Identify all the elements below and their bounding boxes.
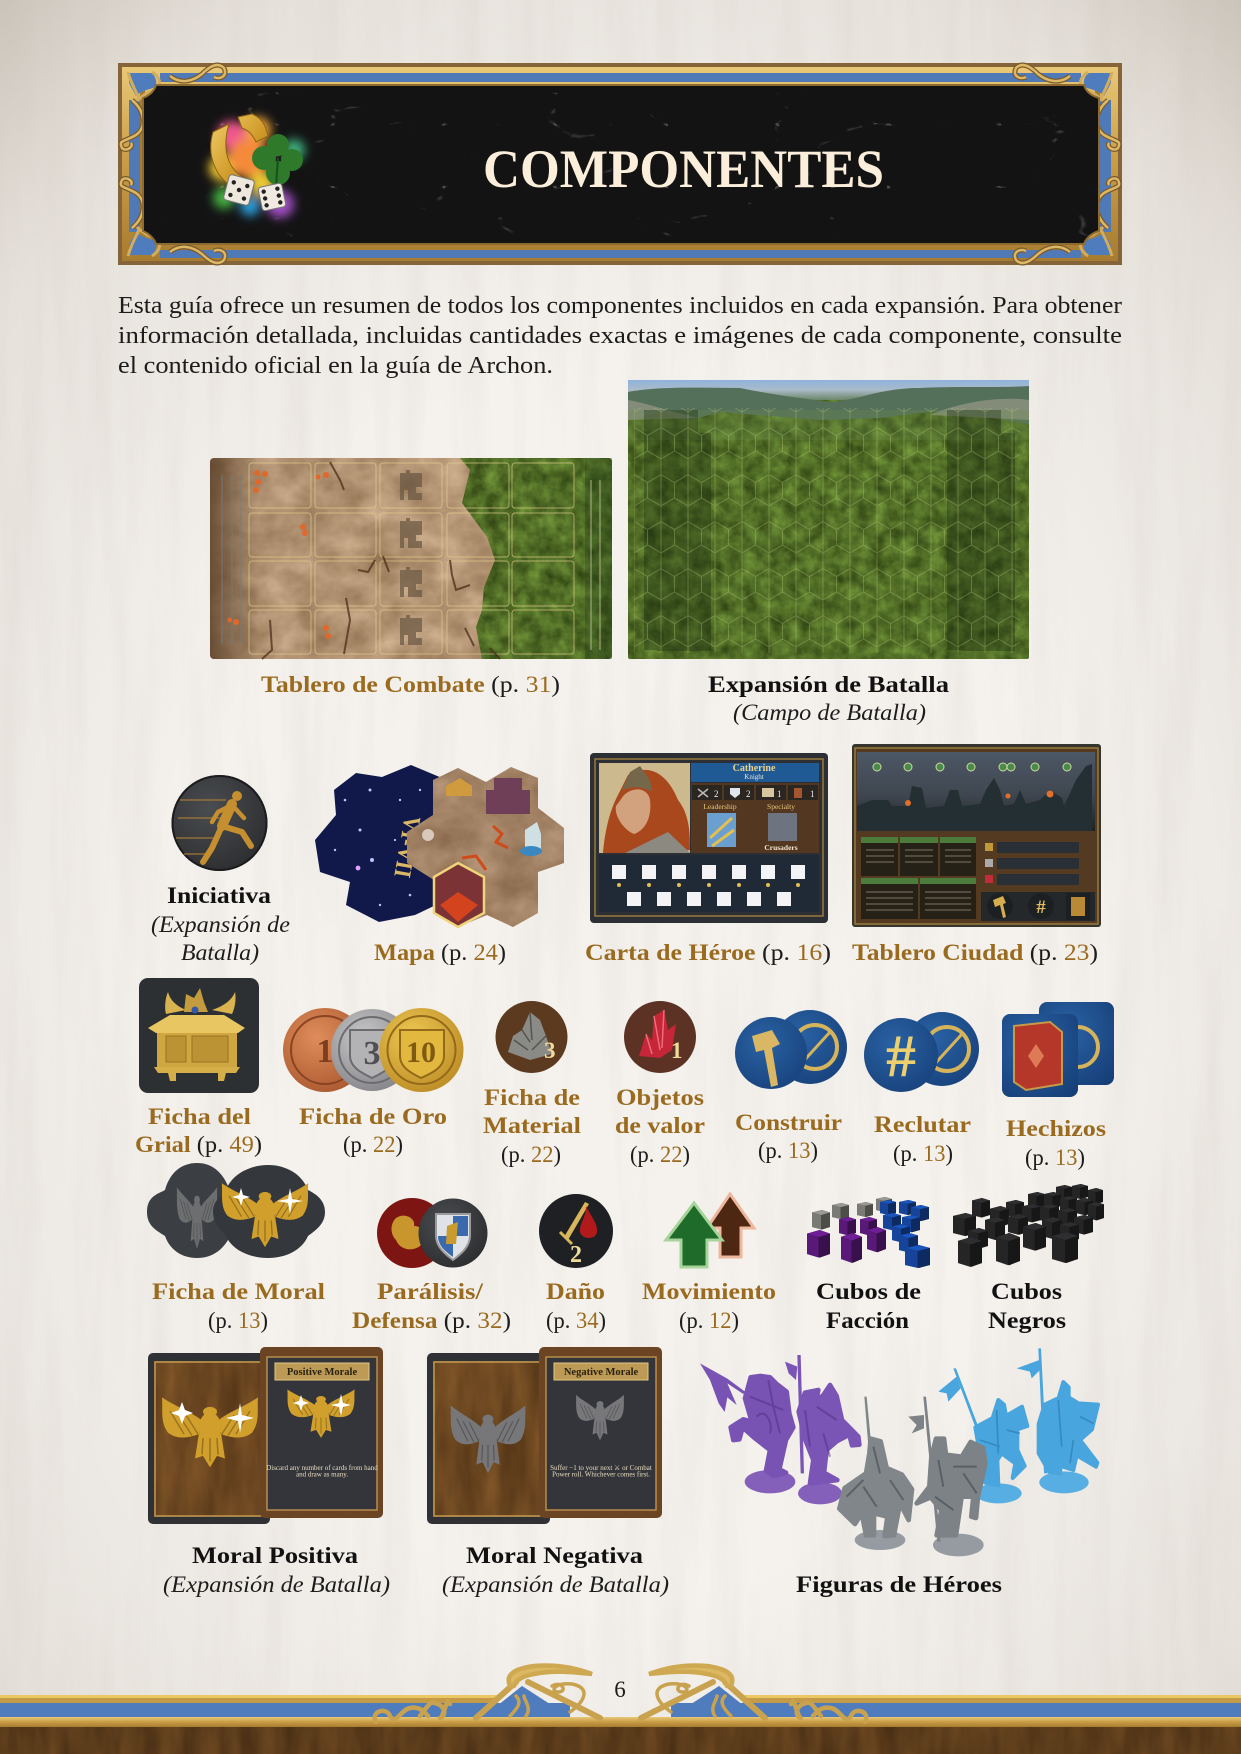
card title xyxy=(554,1363,648,1380)
icon: valuables token xyxy=(624,1001,696,1073)
card rules xyxy=(550,1464,652,1478)
lava veins xyxy=(462,826,508,870)
icon: horseshoe, clover and dice xyxy=(209,114,305,218)
caption: morale tokens: (p. 13) xyxy=(208,1308,268,1333)
icon: paralysis and defense tokens xyxy=(377,1198,488,1268)
cracks xyxy=(262,462,500,659)
caption: faction cubes: Facción xyxy=(826,1308,909,1333)
banner frame xyxy=(118,63,1122,265)
intro text: Esta guía ofrece un resumen de todos los componentes incluidos en cada expansión. Para obtener xyxy=(118,293,1122,319)
negative morale cards xyxy=(427,1347,662,1524)
name header xyxy=(691,763,819,782)
waterfall xyxy=(525,822,541,852)
caption: recruit: Reclutar xyxy=(874,1112,971,1137)
buildings xyxy=(446,778,472,796)
caption: black cubes: Negros xyxy=(988,1308,1066,1333)
caption: grail: Grial (p. 49) xyxy=(135,1132,262,1157)
caption: positive morale xyxy=(163,1543,390,1597)
card rules: Discard any number of cards from hand xyxy=(266,1464,378,1472)
side rule lines xyxy=(222,475,600,650)
caption: paralysis xyxy=(352,1279,511,1333)
card rules xyxy=(266,1464,378,1478)
purple miniature with axe xyxy=(785,1355,859,1504)
card front xyxy=(260,1347,383,1518)
stats and abilities: 1 xyxy=(810,789,814,799)
caption: faction cubes: Cubos de xyxy=(816,1279,921,1304)
caption: spells: (p. 13) xyxy=(1025,1145,1085,1170)
card title: Negative Morale xyxy=(564,1367,639,1378)
grey morale token xyxy=(147,1163,250,1258)
caption: combat board: Tablero de Combate (p. 31) xyxy=(261,672,560,697)
icon: valuables token: 1 xyxy=(671,1038,682,1063)
copper coin: 1 xyxy=(316,1033,334,1070)
gold morale token xyxy=(213,1165,325,1258)
caption: negative morale xyxy=(442,1543,669,1597)
stats and abilities: 1 xyxy=(777,789,782,799)
stats and abilities: 2 xyxy=(714,789,718,799)
caption: grail xyxy=(135,1104,262,1157)
brown arrow xyxy=(707,1194,754,1257)
lava hex xyxy=(434,863,484,927)
caption: material: Ficha de xyxy=(484,1085,580,1110)
caption: initiative: Batalla) xyxy=(181,940,259,965)
orange tokens xyxy=(228,470,331,639)
caption: movement: (p. 12) xyxy=(679,1308,739,1333)
icon: black cubes xyxy=(953,1184,1104,1267)
caption: initiative xyxy=(151,883,290,965)
hex grid xyxy=(634,408,1020,653)
caption: positive morale: Moral Positiva xyxy=(192,1543,359,1568)
caption: initiative: (Expansión de xyxy=(151,912,290,937)
stats and abilities: 2 xyxy=(746,789,750,799)
caption: battle expansion xyxy=(708,672,950,725)
caption: material: Material xyxy=(483,1113,581,1138)
left scrollwork xyxy=(375,1665,600,1722)
upper gold rails xyxy=(0,1695,1241,1703)
icon: movement arrows xyxy=(666,1194,754,1267)
stats and abilities: Crusaders xyxy=(764,843,798,852)
caption: valuables: de valor xyxy=(615,1113,705,1138)
icon: spell tokens xyxy=(1002,1002,1114,1097)
lower gold rail xyxy=(0,1717,1241,1727)
card title: Positive Morale xyxy=(287,1367,357,1378)
dark deployment columns xyxy=(644,410,1015,651)
green terrain xyxy=(460,458,612,659)
battlefield board xyxy=(628,380,1029,659)
building icons xyxy=(981,892,1095,921)
icon: grail token xyxy=(139,978,259,1093)
gold coin xyxy=(380,1008,464,1092)
caption: hero card: Carta de Héroe (p. 16) xyxy=(585,940,831,965)
page number: 6 xyxy=(614,1677,626,1702)
icon: gold coins xyxy=(283,1008,464,1092)
icon: recruit tokens: # xyxy=(886,1023,916,1089)
icon: faction cubes xyxy=(807,1197,930,1268)
building icons: # xyxy=(1036,897,1046,918)
caption: movement xyxy=(642,1279,776,1333)
caption: gold: (p. 22) xyxy=(343,1132,403,1157)
caption: spells xyxy=(1006,1116,1106,1170)
brown base xyxy=(0,1727,1241,1754)
caption: hero miniatures: Figuras de Héroes xyxy=(796,1572,1002,1597)
icon: material token: 3 xyxy=(544,1038,556,1063)
name header: Knight xyxy=(744,773,764,781)
castle walls xyxy=(400,470,422,645)
caption: morale tokens: Ficha de Moral xyxy=(152,1279,325,1304)
name header: Catherine xyxy=(733,763,776,774)
caption: damage xyxy=(546,1279,606,1333)
card title xyxy=(275,1363,369,1380)
caption: spells: Hechizos xyxy=(1006,1116,1106,1141)
gold coin: 10 xyxy=(406,1036,436,1069)
card rules: Power roll. Whichever comes first. xyxy=(552,1470,650,1478)
right scrollwork xyxy=(641,1665,866,1722)
portrait xyxy=(599,763,690,853)
caption: grail: Ficha del xyxy=(148,1104,251,1129)
hero card xyxy=(590,753,828,923)
caption: gold xyxy=(299,1104,447,1157)
stats and abilities xyxy=(691,783,819,853)
icon: build tokens xyxy=(735,1010,847,1089)
icon: material token xyxy=(496,1001,568,1073)
building slots panel xyxy=(599,855,819,912)
blue miniature with lance xyxy=(1017,1348,1098,1493)
caption: black cubes: Cubos xyxy=(991,1279,1062,1304)
board grid xyxy=(249,463,574,654)
card rules: Suffer −1 to your next ⚔ or Combat xyxy=(550,1464,652,1472)
blue band xyxy=(0,1703,1241,1717)
banner panel xyxy=(118,63,1122,265)
caption: valuables xyxy=(615,1085,705,1167)
sky and mountains xyxy=(628,380,1029,440)
footer ornament band xyxy=(0,1665,1241,1754)
stats and abilities: Specialty xyxy=(767,802,795,811)
caption: map: Mapa (p. 24) xyxy=(374,940,506,965)
icon: morale tokens xyxy=(147,1163,325,1258)
grey miniature with flag xyxy=(908,1397,985,1556)
card rules: and draw as many. xyxy=(296,1470,348,1478)
caption: battle expansion: (Campo de Batalla) xyxy=(733,700,926,725)
icon: initiative token xyxy=(172,775,268,871)
caption: recruit xyxy=(874,1112,971,1166)
caption: paralysis: Defensa (p. 32) xyxy=(352,1308,511,1333)
terrain hexes xyxy=(407,767,564,927)
star hex: VI-VII xyxy=(388,814,425,880)
star hex xyxy=(315,765,442,922)
caption: positive morale: (Expansión de Batalla) xyxy=(163,1572,390,1597)
blue miniature with banner xyxy=(938,1368,1027,1503)
purple miniature with banner xyxy=(700,1363,795,1493)
caption: damage: Daño xyxy=(546,1279,605,1304)
caption: negative morale: (Expansión de Batalla) xyxy=(442,1572,669,1597)
positive morale cards xyxy=(148,1347,383,1524)
resource tracks xyxy=(985,842,1079,885)
caption: city board: Tablero Ciudad (p. 23) xyxy=(852,940,1098,965)
map hexes xyxy=(315,765,564,927)
caption: battle expansion: Expansión de Batalla xyxy=(708,672,950,697)
caption: black cubes xyxy=(988,1279,1066,1333)
icon: recruit tokens xyxy=(864,1012,979,1092)
caption: morale tokens xyxy=(152,1279,325,1333)
stats and abilities: Leadership xyxy=(703,802,737,811)
green arrow xyxy=(666,1203,722,1267)
caption: movement: Movimiento xyxy=(642,1279,776,1304)
card front xyxy=(539,1347,662,1518)
copper coin xyxy=(283,1008,367,1092)
caption: material: (p. 22) xyxy=(501,1142,561,1167)
caption: valuables: Objetos xyxy=(616,1085,704,1110)
combat board xyxy=(210,458,612,659)
banner black marble xyxy=(143,85,1099,244)
card back xyxy=(148,1353,270,1524)
caption: damage: (p. 34) xyxy=(546,1308,606,1333)
caption: build: (p. 13) xyxy=(758,1138,818,1163)
caption: gold: Ficha de Oro xyxy=(299,1104,447,1129)
silver coin: 3 xyxy=(364,1035,380,1072)
caption: build xyxy=(735,1110,842,1163)
hero miniatures xyxy=(700,1348,1098,1556)
storm sky and towers xyxy=(857,752,1095,831)
intro text: información detallada, incluidas cantidades exactas e imágenes de cada componente, consulte xyxy=(118,323,1122,349)
intro text xyxy=(118,293,1122,379)
caption: faction cubes xyxy=(816,1279,921,1333)
caption: initiative: Iniciativa xyxy=(167,883,272,908)
building rules xyxy=(861,837,976,919)
caption: material xyxy=(483,1085,581,1167)
intro text: el contenido oficial en la guía de Archon. xyxy=(118,353,553,379)
caption: valuables: (p. 22) xyxy=(630,1142,690,1167)
caption: paralysis: Parálisis/ xyxy=(377,1279,484,1304)
card back xyxy=(427,1353,550,1524)
grey miniature with lance xyxy=(839,1397,912,1550)
silver coin xyxy=(331,1009,413,1091)
caption: build: Construir xyxy=(735,1110,842,1135)
caption: negative morale: Moral Negativa xyxy=(466,1543,644,1568)
caption: recruit: (p. 13) xyxy=(893,1141,953,1166)
city board xyxy=(852,744,1101,927)
title: COMPONENTES xyxy=(483,139,884,199)
icon: damage token xyxy=(539,1194,613,1268)
icon: damage token: 2 xyxy=(570,1242,582,1268)
